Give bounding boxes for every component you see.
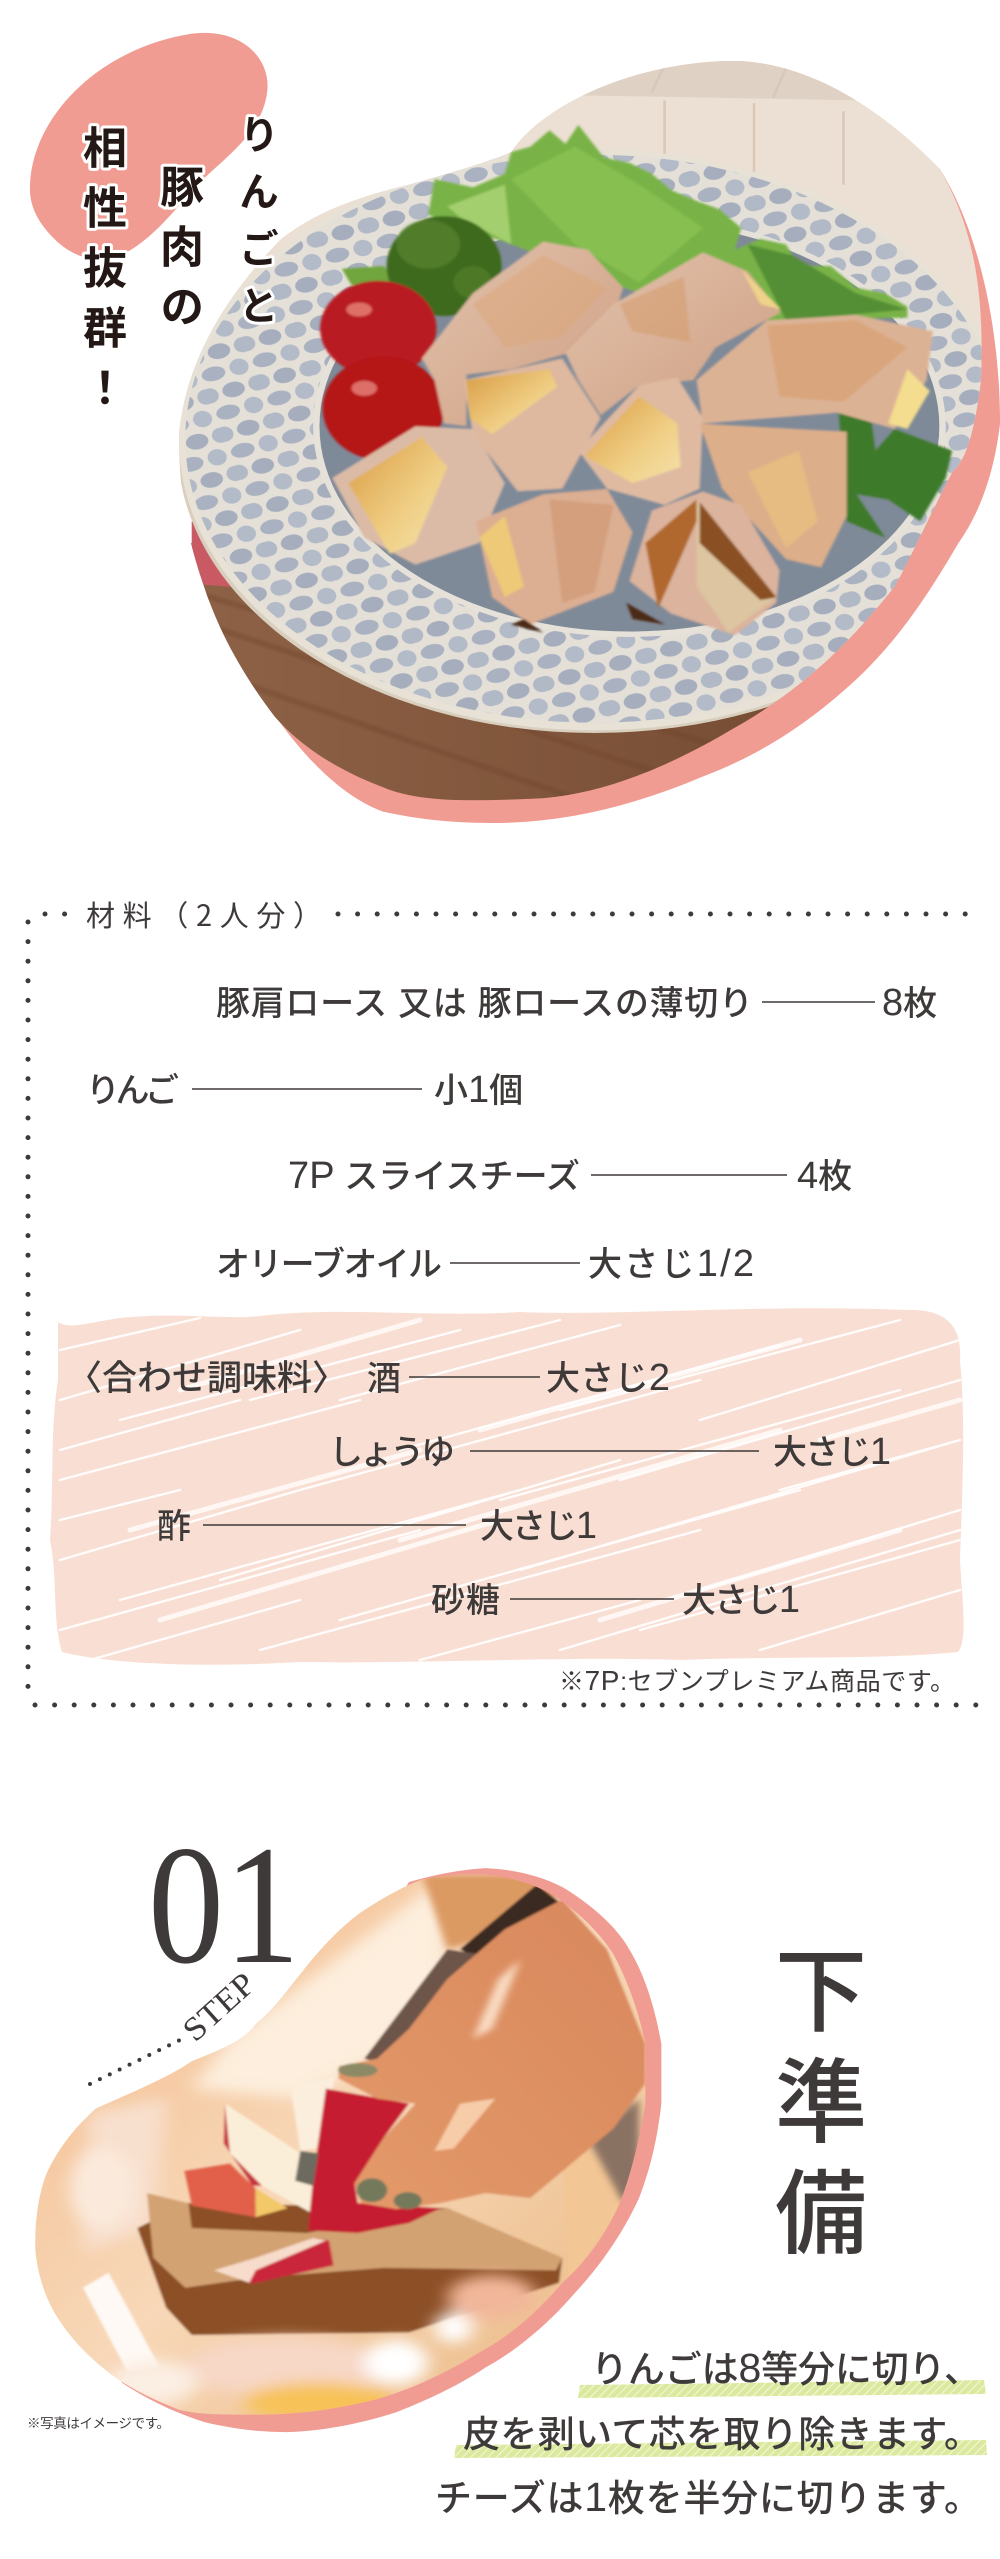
row: soy sauce: 大さじ1 [773,1431,891,1473]
step number: 01 [148,1811,300,1999]
row: cheese: 4枚 [797,1155,852,1197]
apple [308,2089,441,2233]
row: vinegar: 酢 [157,1508,191,1546]
row: pork [216,982,937,1024]
row: sugar: 砂糖 [431,1582,500,1620]
tomatoes [320,281,436,376]
apple slices [184,2163,256,2217]
nails [338,2063,378,2077]
row: cheese: 7P スライスチーズ [288,1155,580,1197]
red napkin [192,521,231,587]
row: sauce label and sake: 〈合わせ調味料〉 [67,1359,347,1398]
row: pork: 8枚 [882,982,937,1024]
hero section [30,33,1000,825]
row: apple [86,1069,523,1111]
plate [179,352,917,733]
roll lower right [700,424,847,567]
row: soy sauce [329,1431,891,1473]
row: sauce label and sake: 酒 [367,1360,401,1398]
roll right [697,315,933,429]
row: olive oil: 大さじ1/2 [588,1243,754,1285]
row: sauce label and sake: 大さじ2 [546,1357,670,1399]
ingredients panel [28,893,980,1705]
row: pork: 豚肩ロース 又は 豚ロースの薄切り [216,985,753,1023]
broccoli [387,216,502,316]
cutting board [137,2203,562,2335]
row: sugar: 大さじ1 [682,1579,800,1621]
row: vinegar [157,1505,597,1547]
row: cheese [288,1155,852,1197]
roll top middle [566,252,781,415]
dotted leader [90,2039,182,2084]
roll top left [422,242,623,426]
wooden table [191,543,916,800]
hand [339,1899,645,2209]
instruction line 2: 皮を剥いて芯を取り除きます。 [463,2414,981,2455]
pink rim [121,1868,661,2432]
headline: 相性抜群！: 相性抜群！ [73,125,137,425]
roll bottom middle [476,489,633,624]
step label: STEP [176,1966,263,2049]
step title: 下準備 [754,1943,888,2276]
scribble background [45,1300,975,1675]
footnote: ※7P:セブンプレミアム商品です。 [559,1665,955,1696]
highlight 1 [578,2380,986,2398]
row: sugar [431,1579,800,1621]
pink rim behind hero photo [278,109,1000,823]
sauce [511,603,665,633]
row: vinegar: 大さじ1 [480,1505,597,1547]
row: apple: 小1個 [434,1069,523,1111]
instruction line 1: りんごは8等分に切り、 [591,2345,981,2391]
knife [459,1886,560,1956]
roll centre [578,377,703,505]
cloth background [202,61,982,348]
blurred foreground [70,2148,537,2422]
hero photo: pork and apple rolls on a plate [160,54,1000,825]
row: olive oil [216,1243,754,1285]
dotted frame [28,914,980,1705]
row: sauce label and sake [67,1357,670,1399]
highlight 2 [454,2440,987,2458]
roll bottom right [629,491,780,635]
headline: 豚肉の: 豚肉の [150,164,214,344]
blurred kitchen background [26,1865,665,2422]
instruction line 3: チーズは1枚を半分に切ります。 [435,2474,981,2520]
step 01 section [26,1811,987,2520]
cooking photo [26,1865,665,2432]
photo note: ※写真はイメージです。 [27,2416,170,2431]
ingredients heading: 材料（2人分） [86,893,322,935]
pink blob behind headline [30,33,268,260]
roll centre left [463,358,601,491]
row: apple: りんご [86,1072,179,1110]
lettuce [428,125,907,320]
parsley [838,405,952,538]
row: olive oil: オリーブオイル [216,1246,442,1284]
roll bottom left [332,426,505,565]
row: soy sauce: しょうゆ [329,1434,455,1472]
headline: りんごと: りんごと [230,114,288,342]
